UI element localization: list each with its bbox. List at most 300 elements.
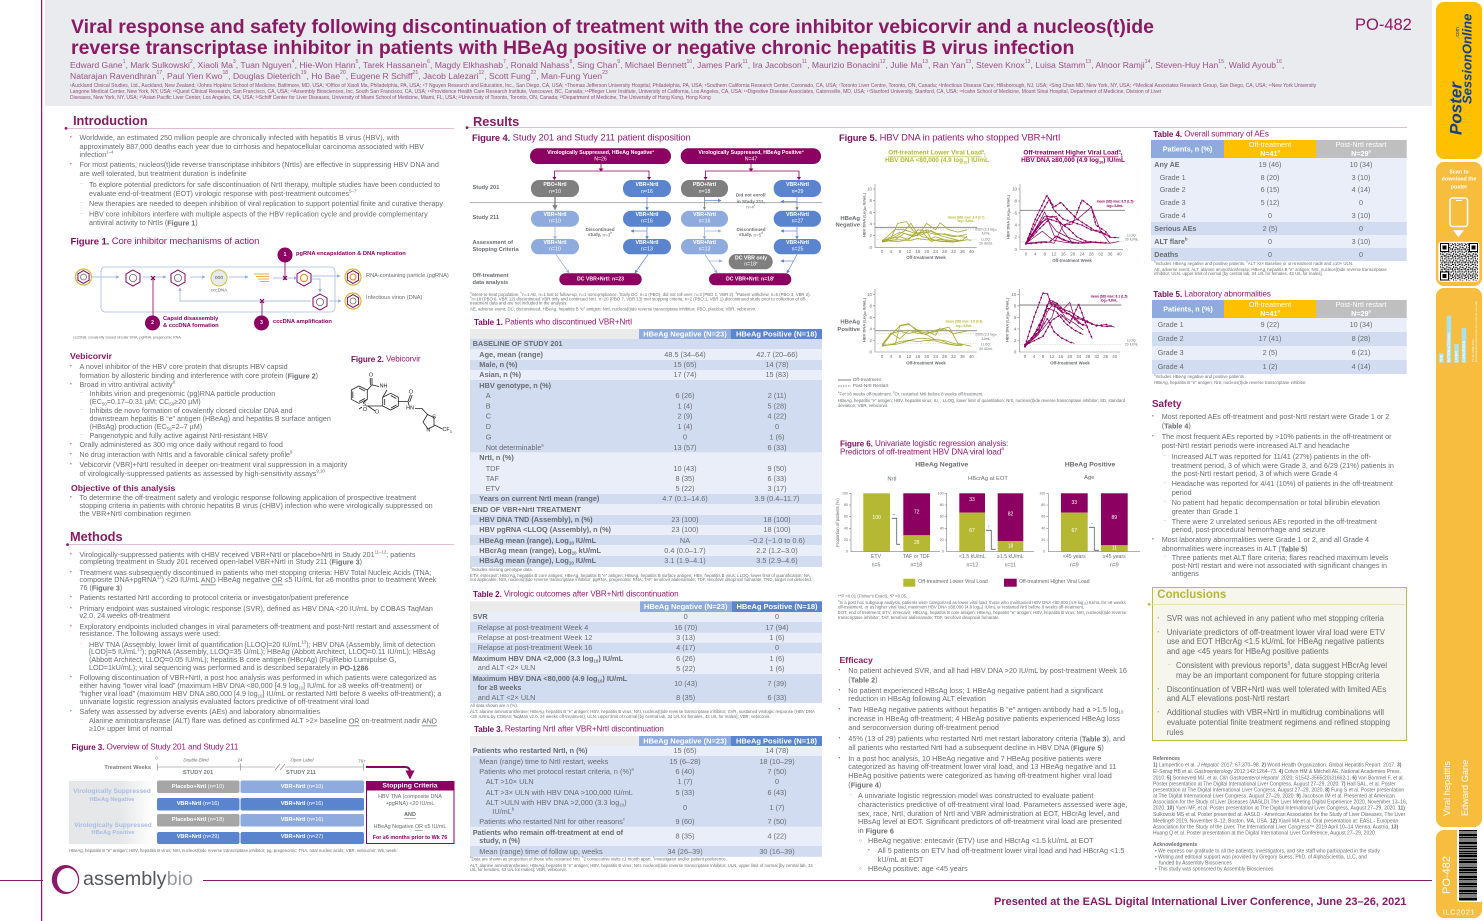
table 1: patients who discontinued: 13 (57) bbox=[673, 443, 697, 452]
diagram: study overview: Double-Blind bbox=[183, 758, 209, 762]
table 3: restarting NrtI: 5 (33) bbox=[675, 788, 695, 797]
text block: efficacy bullets: • bbox=[838, 736, 840, 742]
text block: conclusions bullets: Additional studies with VBR+NrtI in multidrug combinations will bbox=[1167, 708, 1384, 717]
right rail: poster number and barcode: PO-482 bbox=[1441, 856, 1453, 894]
figure 2: vebicorvir structure: O bbox=[409, 390, 413, 396]
text block: efficacy bullets: categorized as having off-treatment lower viral load, and 13 HBeAg negative and 11 bbox=[848, 762, 1116, 771]
right rail: poster session online: SessionOnline bbox=[1460, 14, 1474, 104]
figure 5 column headings: Off-treatment Higher Viral Loadb, bbox=[1023, 149, 1123, 156]
chart: NrtI: n=18 bbox=[910, 562, 922, 568]
text block: efficacy bullets: in Figure 6 bbox=[858, 826, 894, 835]
table 5: laboratory abnormalities: Patients, n (%) bbox=[1163, 304, 1213, 314]
flowchart: patient disposition: n=16 bbox=[641, 218, 653, 224]
flowchart: patient disposition: n=25 bbox=[792, 246, 803, 252]
diagram: core inhibitor mechanisms: cccDNA bbox=[211, 288, 228, 292]
table 2: virologic outcomes: HBeAg Negative (N=23) bbox=[644, 602, 728, 611]
text block: efficacy bullets: (Table 2) bbox=[848, 675, 878, 684]
figure 5 column headings: Off-treatment Lower Viral Loada, bbox=[888, 149, 986, 156]
table 1: patients who discontinued: A bbox=[486, 391, 491, 400]
chart: positive lower viral load: 16 bbox=[915, 354, 921, 359]
diagram: core inhibitor mechanisms bbox=[73, 248, 449, 340]
text block: methods bullets: • bbox=[70, 552, 72, 558]
flowchart: patient disposition: n=4c bbox=[746, 204, 756, 210]
track and author: Edward Gane bbox=[1460, 760, 1470, 816]
table 3: restarting NrtI: IU/mLb bbox=[492, 806, 515, 816]
right rail: poster session online: Poster bbox=[1446, 81, 1466, 135]
panel: introduction bbox=[65, 113, 454, 518]
text block: methods bullets: Alanine aminotransferase (ALT) flare was defined as confirmed ALT >2× baseline OR on-treatment nadir AND bbox=[89, 716, 437, 725]
text block: efficacy bullets bbox=[838, 666, 1127, 873]
text block: vebicorvir bullets: Inhibits virion and pregenomic (pg)RNA particle production bbox=[90, 389, 275, 398]
table 5: laboratory abnormalities: 2 (5) bbox=[1263, 348, 1277, 357]
table 1: patients who discontinued: TDF bbox=[486, 464, 500, 473]
chart: positive higher viral load: 32 bbox=[1094, 354, 1100, 359]
table 3: restarting NrtI: ALT >ULN with HBV DNA >2,000 (3.3 log10) bbox=[486, 798, 627, 807]
references: El-Serag HB et al. Gastroenterology 2012;142:1264–73. 4) Colvin HM & Mitchell AE. National Academies Press. bbox=[1153, 769, 1401, 775]
chart: negative lower viral load: 6 bbox=[870, 210, 873, 215]
text block: conclusions bullets: • bbox=[1158, 709, 1160, 715]
flowchart: patient disposition: VBR+NrtI bbox=[544, 240, 567, 246]
flowchart: patient disposition: Virologically Suppressed, HBeAg Positivea bbox=[698, 149, 804, 156]
table 1: patients who discontinued: 3.1 (1.9–4.1) bbox=[664, 556, 706, 565]
diagram: study overview: HBeAg, hepatitis B “e” antigen; HBV, hepatitis B virus; NrtI, nucleos(t)ide reverse transcriptase inhibitor; pg, pregenomic; TNA, total nucleic acids; VBR, vebicorvir; Wk, week. bbox=[69, 848, 398, 853]
table 3: restarting NrtI: 6 (40) bbox=[675, 767, 695, 776]
table 3: restarting NrtI: Patients who met protocol restart criteria, n (%)a bbox=[479, 766, 634, 776]
text block: vebicorvir bullets: • bbox=[70, 452, 72, 458]
text block: introduction bullets: To explore potential predictors for safe discontinuation of NrtI therapy, multiple studies have been conducted to bbox=[89, 180, 440, 189]
bar charts: predictors of viral load: NrtI bbox=[887, 476, 897, 482]
chart: positive lower viral load bbox=[862, 289, 998, 366]
authors: Edward Gane1, Mark Sulkowski2, Xiaoli Ma3, Tuan Nguyen4, Hie-Won Hann5, Tarek Hassanein6, Magdy Elkhashab7, Ronald Nahass8, Sing Chan9, Michael Bennett10, James Park11, Ira Jacobson11, Maurizio Bonacini12, Julie Ma13, Ran Yan13, Steven Knox13, Luisa Stamm13, Alnoor Ramji14, Steven-Huy Han15, Walid Ayoub16, bbox=[70, 59, 1284, 70]
text block: efficacy bullets: HBeAg positive patients were categorized as having off-treatment higher viral load bbox=[848, 771, 1112, 780]
right rail: congress and track bbox=[1436, 288, 1482, 827]
footnote: table 1 bbox=[470, 566, 812, 582]
chart: positive higher viral load bbox=[1004, 289, 1139, 366]
references: Huang Q et al. Poster presentation at the Digital International Liver Conference, August 27–29, 2020. bbox=[1153, 830, 1376, 836]
chart: negative higher viral load: 0 bbox=[1015, 247, 1018, 252]
table 3: restarting NrtI: 6 (43) bbox=[767, 788, 787, 797]
text block: safety bullets: (Table 4) bbox=[1162, 421, 1191, 430]
diagram: study overview: VBR+NrtI (n=29) bbox=[177, 834, 219, 840]
badge: the international liver congress: CONGRESS bbox=[1462, 340, 1466, 362]
table 1: patients who discontinued: NrtI, n (%) bbox=[479, 453, 514, 462]
flowchart: patient disposition bbox=[470, 148, 822, 286]
chart: negative higher viral load: HBV DNA (Log10 IU/mL) bbox=[1006, 194, 1011, 239]
legend: figure 5: Off-treatment bbox=[853, 377, 882, 383]
chart: age: 67 bbox=[1072, 528, 1077, 534]
chart: negative higher viral load: 10 bbox=[1012, 186, 1018, 192]
diagram: core inhibitor mechanisms: cccDNA amplification bbox=[273, 319, 332, 325]
text block: safety bullets: Increased ALT was reported for 11/41 (27%) patients in the off- bbox=[1172, 452, 1372, 461]
chart: HBcrAg at EOT: 40 bbox=[940, 526, 944, 530]
references: References bbox=[1153, 756, 1180, 762]
table 2: virologic outcomes: 1 (6) bbox=[769, 664, 785, 673]
diagram: study overview: VBR+NrtI (n=10) bbox=[281, 784, 323, 790]
table 4: overall summary of AEs: Grade 4 bbox=[1160, 211, 1186, 220]
chart: positive higher viral load: 20 bbox=[1067, 354, 1073, 359]
footnote: table 5: HBeAg, hepatitis B “e” antigen; NrtI, nucleos(t)ide reverse transcriptase inhibitor. bbox=[1154, 380, 1307, 385]
text block: efficacy bullets: HBsAg level at EOT. Significant predictors of off-treatment viral load are presented bbox=[858, 817, 1122, 826]
text block: vebicorvir bullets: of virologically-suppressed patients as assessed by high-sensitivity assays9,10 bbox=[80, 468, 325, 478]
table 1: patients who discontinued: 2 (11) bbox=[768, 391, 786, 400]
table 1: patients who discontinued: 18 (100) bbox=[763, 525, 791, 534]
affiliations: Diseases, New York, NY, USA; ²⁰Asian Pacific Liver Center, Los Angeles, CA, USA; ²¹Schiff Center for Liver Diseases, University of Miami School of Medicine, Miami, FL, USA; ²²University of Toronto, Toronto, ON, Canada; ²³Department of Medicine, The University of Hong Kong, Hong Kong bbox=[70, 95, 711, 101]
text block: methods bullets: • bbox=[70, 708, 72, 714]
table 3: restarting NrtI: 8 (35) bbox=[675, 832, 695, 840]
text block: efficacy bullets: HBeAg negative: entecavir (ETV) use and HBcrAg <1.5 kU/mL at EOT bbox=[868, 836, 1094, 845]
chart: HBcrAg at EOT: 18 bbox=[1008, 544, 1013, 550]
badge: the international liver congress: LIVER bbox=[1454, 351, 1458, 362]
chart: negative lower viral load: 0 bbox=[881, 249, 884, 254]
table 1: patients who discontinued: TAF bbox=[486, 474, 499, 483]
table 3: restarting NrtI: study, n (%) bbox=[479, 836, 521, 845]
table 3: restarting NrtI: Patients who restarted NrtI for other reasonsc bbox=[479, 816, 626, 826]
footnote: figure 6: EOT, end of treatment; ETV, entecavir; HBcrAg, hepatitis B core antigen; HBeAg, hepatitis “e” antigen; HBV, hepatitis B virus; NrtI, nucleos(t)ide reverse bbox=[838, 610, 1127, 615]
figure 2: vebicorvir structure: S bbox=[432, 414, 436, 420]
affiliations: Langone Medical Center, New York, NY, USA; ¹²Quest Clinical Research, San Francisco, CA, USA; ¹³Assembly Biosciences, Inc, South San Francisco, CA, USA; ¹⁴Providence Health Care Research Institute, Vancouver, BC, Canada; ¹⁵Pfleger Liver Institute, University of California, Los Angeles, CA, USA; ¹⁶Digestive Disease Associates, Catonsville, MD, USA; ¹⁷Stanford University, Stanford, CA, USA; ¹⁸Icahn School of Medicine, Mount Sinai Hospital, Department of Medicine, Division of Liver bbox=[70, 89, 1162, 95]
diagram: study overview: 24 bbox=[238, 758, 243, 762]
figure 5 column headings: HBV DNA <80,000 (4.9 log10) IU/mL bbox=[885, 157, 989, 165]
chart: negative lower viral load: 8 bbox=[899, 249, 902, 254]
chart: negative lower viral load: HBV DNA (Log10 IU/mL) bbox=[862, 192, 867, 237]
text block: methods bullets: Primary endpoint was sustained virologic response (SVR), defined as HBV DNA <20 IU/mL by COBAS TaqMan bbox=[80, 604, 433, 613]
table 4: overall summary of AEs: N=41a bbox=[1260, 148, 1280, 158]
text block: methods bullets: composite DNA+pgRNA12) <20 IU/mL AND HBeAg negative OR ≤5 IU/mL for ≥6 months prior to treatment Week bbox=[80, 574, 437, 584]
table 1: patients who discontinued: 0 bbox=[775, 422, 779, 431]
title: reverse transcriptase inhibitor in patients with HBeAg positive or negative chronic hepatitis B virus infection bbox=[71, 37, 1074, 59]
footnote: figure 4 bbox=[470, 290, 811, 312]
footnote: table 3: U/L for females, 43 U/L for males]; VBR, vebicorvir. bbox=[470, 867, 567, 872]
text block: efficacy bullets: No patient achieved SVR, and all had HBV DNA >20 IU/mL by post-treatment Week 16 bbox=[848, 666, 1127, 675]
flowchart: patient disposition: VBR+NrtI bbox=[786, 182, 810, 188]
table 1: patients who discontinued: 5 (22) bbox=[675, 484, 695, 493]
table 1: patients who discontinued: D bbox=[486, 422, 491, 431]
table 3: restarting NrtI: 4 (22) bbox=[767, 832, 787, 840]
text block: methods bullets bbox=[70, 550, 441, 733]
table 4: overall summary of AEs: 3 (10) bbox=[1352, 237, 1370, 246]
flowchart: patient disposition: in Study 211, bbox=[737, 199, 765, 204]
affiliations: ¹Auckland Clinical Studies, Ltd., Auckland, New Zealand; ²Johns Hopkins School of Medicine, Baltimore, MD, USA; ³Office of Xiaoli Ma, Philadelphia, PA, USA; ⁴T Nguyen Research and Education, Inc., San Diego, CA, USA; ⁵Thomas Jefferson University Hospital, Philadelphia, PA, USA; ⁶Southern California Research Center, Coronado, CA, USA; ⁷Toronto Liver Centre, Toronto, ON, Canada; ⁸Infectious Disease Care, Hillsborough, NJ, USA; ⁹Sing Chan MD, New York, NY, USA; ¹⁰Medical Associates Research Group, San Diego, CA, USA; ¹¹New York University bbox=[70, 83, 1317, 89]
table 5: laboratory abnormalities: 10 (34) bbox=[1350, 320, 1372, 329]
chart: age: 33 bbox=[1072, 500, 1077, 506]
chart: negative higher viral load: 2 bbox=[1015, 234, 1018, 240]
text block: efficacy bullets: all patients who restarted NrtI had a subsequent decline in HBV DNA (Figure 5) bbox=[848, 743, 1104, 752]
table 1: patients who discontinued: 23 (100) bbox=[671, 515, 699, 524]
table 3: restarting NrtI: 15 (6–28) bbox=[669, 757, 701, 766]
table 1: patients who discontinued: 15 (83) bbox=[765, 370, 789, 379]
chart: negative higher viral load: 0 bbox=[1025, 252, 1028, 256]
table 4: overall summary of AEs: Patients, n (%) bbox=[1163, 144, 1213, 154]
flowchart: patient disposition: Virologically Suppressed, HBeAg Negativea bbox=[547, 149, 654, 156]
references: presentation at The Digital International Liver Congress, August 27–29, 2020. 8) Fung S et al. Poster presentation bbox=[1153, 787, 1404, 793]
row labels: HBeAg status: HBeAg bbox=[840, 216, 860, 222]
footnote: figure 4: en=18 (PBO 6, VBR 12) discontinued VBR only and continued NrtI. fn=20 (PBO 7, VBR 13) met stopping criteria, n=2 (PBO 1, VBR 1) discontinued study prior to collection of off- bbox=[470, 295, 807, 302]
chart: positive lower viral load: Off-treatment Week bbox=[906, 360, 946, 366]
chart: HBcrAg at EOT: 0 bbox=[942, 550, 944, 554]
text block: methods bullets: resistance. The following assays were used: bbox=[80, 629, 220, 638]
title bbox=[71, 16, 1154, 59]
chart: age: 40 bbox=[1041, 526, 1045, 530]
references: Association for the Study of the Liver, The International Liver Congress™ 2019 April 10–14 Vienna, Austria. 13) bbox=[1153, 824, 1399, 830]
diagram: core inhibitor mechanisms: 2 bbox=[151, 320, 154, 326]
chart: negative lower viral load: mean (SD) max: 3.4 (0.7) bbox=[948, 215, 984, 219]
icon: QR code bbox=[1438, 242, 1479, 282]
chart: HBcrAg at EOT: n=12 bbox=[966, 562, 978, 568]
chart: negative lower viral load bbox=[862, 184, 998, 260]
panel: methods bbox=[66, 529, 454, 853]
right rail: poster session online: .com bbox=[1455, 27, 1461, 38]
text block: methods bullets: Virologically-suppressed patients with cHBV received VBR+NrtI or placebo+NrtI in Study 20111–12; patients bbox=[80, 550, 416, 559]
table 1: patients who discontinued: 17 (74) bbox=[673, 370, 697, 379]
chart: positive lower viral load: 8 bbox=[870, 303, 873, 308]
text block: safety bullets: • bbox=[1152, 414, 1154, 420]
table 2: virologic outcomes: 7 (39) bbox=[767, 679, 787, 688]
text block: safety bullets: • bbox=[1152, 537, 1154, 543]
panel: efficacy bbox=[838, 655, 1127, 873]
chart: negative higher viral load: 4 bbox=[1034, 252, 1037, 256]
text block: safety bullets: – bbox=[1163, 519, 1167, 525]
chart: negative higher viral load: 12 bbox=[1052, 252, 1057, 256]
figure 2: vebicorvir structure: O bbox=[363, 407, 367, 413]
badge: the international liver congress: INTERNATIONAL bbox=[1447, 331, 1451, 362]
footnote: figure 6: off-treatment, or as higher viral load, maximum HBV DNA ≥80,000 (4.9 log10) IU/mL or restarted NrtI before 8 weeks off-treatment. bbox=[838, 604, 1084, 610]
text block: methods bullets: ≥10× upper limit of normal bbox=[89, 724, 173, 733]
table 3: restarting NrtI: 0 bbox=[775, 777, 779, 786]
footer: conference line: Presented at the EASL Digital International Liver Conference, June 23–26, 2021 bbox=[994, 896, 1406, 908]
text block: safety bullets: the post-NrtI restart period, 3 of which were Grade 4 bbox=[1172, 469, 1337, 478]
text block: methods bullets: HBV TNA (Assembly, lower limit of quantification [LLOQ]=20 IU/mL13); HBV DNA (Assembly, limit of detection bbox=[89, 640, 435, 649]
text block: efficacy bullets: sex, race, NrtI, duration of NrtI and VBR administration at EOT, HBcrAg level, and bbox=[858, 809, 1120, 818]
chart: negative lower viral load: Off-treatment Week bbox=[906, 255, 946, 260]
diagram: study overview: VBR+NrtI (n=16) bbox=[281, 817, 323, 823]
footnote: figure 6: **P <0.01 (Fisher's Exact), *P <0.05. bbox=[838, 594, 907, 598]
chart: negative higher viral load: 28 bbox=[1089, 252, 1094, 256]
acknowledgments: Acknowledgments bbox=[1153, 842, 1197, 848]
text block: efficacy bullets: 45% (13 of 29) patients who restarted NrtI met restart laboratory criteria (Table 3), and bbox=[848, 734, 1125, 743]
chart: negative higher viral load: 16 bbox=[1061, 252, 1066, 256]
footnote: table 1: not applicable; NrtI, nucleos(t)ide reverse transcriptase inhibitor; pgRNA, pregenomic RNA; TAF, tenofovir alafenamide; TDF, tenofovir disoproxil fumarate; TND, target not detected. bbox=[470, 577, 812, 582]
text block: safety bullets: greater than Grade 1 bbox=[1172, 507, 1238, 516]
bar charts: predictors of viral load bbox=[835, 462, 1140, 587]
footnote: figure 6 bbox=[838, 594, 1127, 620]
table 1: patients who discontinued: 1 (6) bbox=[769, 432, 785, 442]
row labels: HBeAg status: Positive bbox=[837, 327, 861, 333]
table 1: patients who discontinued: 3.9 (0.4–11.7) bbox=[755, 494, 799, 503]
diagram: core inhibitor mechanisms: 1 bbox=[284, 252, 287, 258]
table 4: overall summary of AEs: 19 (46) bbox=[1259, 160, 1281, 169]
table 1: patients who discontinued: HBeAg mean (range), Log10 IU/mL bbox=[479, 536, 597, 545]
chart: NrtI: TAF or TDF bbox=[903, 554, 930, 560]
acknowledgments: • Writing and editorial support was provided by Gregory Suess, PhD, of AlphaScientia, LLC, and bbox=[1155, 854, 1367, 860]
table 1: patients who discontinued: C bbox=[486, 412, 491, 420]
table 1: patients who discontinued: 0.4 (0.0–1.7) bbox=[664, 546, 706, 555]
footnote: table 2: All data shown are n (%). bbox=[470, 703, 518, 708]
diagram: study overview: For ≥6 months prior to Wk 76 bbox=[373, 835, 447, 841]
chart: negative lower viral load: 2 bbox=[870, 233, 873, 238]
table 1: patients who discontinued: 4.7 (0.1–14.6) bbox=[662, 494, 708, 503]
text block: methods bullets: • bbox=[70, 624, 72, 630]
table 3: restarting NrtI: ALT >10× ULN bbox=[486, 777, 534, 786]
flowchart: patient disposition: Assessment of bbox=[472, 240, 513, 246]
text block: vebicorvir bullets: Vebicorvir (VBR)+NrtI resulted in deeper on-treatment viral suppression in a majority bbox=[80, 460, 348, 469]
flowchart: patient disposition: n=10 bbox=[549, 189, 561, 195]
text block: methods bullets: Patients restarted NrtI according to protocol criteria or investigator/patient preference bbox=[80, 593, 349, 602]
table 1: patients who discontinued: 18 (100) bbox=[763, 515, 791, 524]
chart: NrtI: ** bbox=[892, 512, 896, 518]
row labels: HBeAg status: HBeAg bbox=[840, 319, 860, 325]
chart: NrtI: 100 bbox=[872, 515, 881, 521]
chart: positive higher viral load: 24 bbox=[1076, 354, 1082, 359]
text block: methods bullets: – bbox=[80, 642, 84, 648]
chart: age: 20 bbox=[1041, 538, 1045, 542]
chart: positive higher viral load: LLOQ: bbox=[1127, 339, 1137, 343]
table 2: virologic outcomes: 16 (70) bbox=[674, 623, 697, 632]
chart: NrtI: 60 bbox=[844, 515, 848, 519]
chart: negative higher viral load: log 10 IU/mL bbox=[1107, 204, 1123, 208]
references: at The Digital International Liver Congress, August 27–29, 2020. 9) Jacobson IM et al. Presented at American bbox=[1153, 793, 1395, 799]
figure 5 column headings: HBV DNA ≥80,000 (4.9 log10) IU/mL bbox=[1021, 157, 1125, 165]
table 4: overall summary of AEs: 5 (12) bbox=[1261, 198, 1279, 207]
figure 2: vebicorvir structure: HN bbox=[406, 405, 414, 411]
flowchart: patient disposition: DC VBR only bbox=[735, 256, 767, 262]
row labels: HBeAg status bbox=[835, 216, 861, 333]
table 5: laboratory abnormalities: N=41a bbox=[1260, 308, 1280, 318]
table 1: patients who discontinued: HBsAg mean (range), Log10 IU/mL bbox=[479, 556, 597, 566]
table 1: patients who discontinued: B bbox=[486, 402, 491, 410]
text block: methods bullets: Exploratory endpoints included changes in viral parameters off-treatment and post-NrtI restart and assessment of bbox=[80, 622, 439, 631]
text block: conclusions bullets: • bbox=[1158, 615, 1160, 621]
text block: vebicorvir bullets: • bbox=[70, 442, 72, 448]
text block: conclusions bullets bbox=[1158, 614, 1390, 737]
chart: positive lower viral load: 20 IU/mL bbox=[979, 347, 993, 351]
right rail: QR download: Scan to bbox=[1449, 170, 1469, 176]
table 4: overall summary of AEs: Deaths bbox=[1154, 250, 1178, 259]
table 1: patients who discontinued: HBV genotype, n (%) bbox=[479, 381, 552, 390]
footnote: table 4: aIncludes HBeAg negative and positive patients. bALT >2× Baseline or on-treatment nadir and ≥10× ULN. bbox=[1154, 259, 1353, 266]
chart: positive lower viral load: 36 bbox=[960, 354, 965, 359]
chart: age: 0 bbox=[1043, 550, 1045, 554]
text block: introduction bullets: • bbox=[70, 162, 72, 168]
text block: vebicorvir bullets: • bbox=[70, 364, 72, 370]
table 3: restarting NrtI: 18 (10–29) bbox=[759, 757, 795, 766]
table 1: patients who discontinued: G bbox=[486, 432, 492, 442]
diagram: study overview: HBeAg Negative bbox=[89, 797, 135, 803]
chart: HBcrAg at EOT: <1.5 kU/mL bbox=[959, 554, 986, 560]
footnote: table 3: ALT, alanine aminotransferase; HBeAg, hepatitis B “e” antigen; HBV, hepatitis B virus; NrtI, nucleos(t)ide reverse transcriptase inhibitor; ULN, upper limit of normal [by central lab, 34 bbox=[470, 863, 813, 868]
acknowledgments: • This study was sponsored by Assembly Biosciences bbox=[1155, 866, 1274, 872]
text block: efficacy bullets: reduction in HBsAg following ALT elevation bbox=[848, 694, 986, 703]
table 4: overall summary of AEs: Any AE bbox=[1154, 160, 1180, 169]
table 3: restarting NrtI: 9 (60) bbox=[675, 817, 695, 826]
right rail: poster number and barcode bbox=[1436, 829, 1483, 918]
table 3: restarting NrtI: 14 (78) bbox=[765, 746, 789, 755]
chart: age: n=9 bbox=[1110, 562, 1119, 568]
diagram: study overview: STUDY 211 bbox=[286, 770, 316, 776]
text block: efficacy bullets: (Figure 4) bbox=[848, 780, 881, 789]
title: Viral response and safety following discontinuation of treatment with the core inhibitor vebicorvir and a nucleos(t)ide bbox=[71, 16, 1154, 38]
text block: introduction bullets bbox=[70, 133, 443, 227]
diagram: study overview: HBeAg Negative OR ≤5 IU/mL bbox=[374, 824, 446, 830]
chart: negative lower viral load: 24 bbox=[933, 249, 939, 254]
table 1: patients who discontinued: HBcrAg mean (range), Log10 kU/mL bbox=[479, 546, 601, 556]
chart: HBcrAg at EOT: 60 bbox=[940, 515, 944, 519]
figure 2: vebicorvir structure: CF3 bbox=[442, 427, 452, 434]
chart: HBcrAg at EOT: 33 bbox=[969, 497, 975, 503]
text block: conclusions bullets: and age <45 years for HBeAg positive patients bbox=[1167, 647, 1329, 656]
chart: HBcrAg at EOT: 82 bbox=[1008, 512, 1013, 518]
chart: negative lower viral load: 32 bbox=[951, 249, 956, 254]
text block: efficacy bullets: A univariate logistic regression model was constructed to evaluate patient bbox=[858, 791, 1093, 800]
legend: figure 5: Post-NrtI Restart bbox=[853, 383, 889, 389]
authors bbox=[70, 59, 1284, 81]
diagram: study overview: 76+ bbox=[358, 758, 366, 764]
chart: negative lower viral load: 16 bbox=[915, 249, 921, 254]
chart: negative higher viral load: 8 bbox=[1015, 198, 1018, 204]
flowchart: patient disposition: Study 211 bbox=[472, 215, 499, 221]
table 3: restarting NrtI bbox=[470, 736, 822, 857]
chart: positive higher viral load: 12 bbox=[1050, 354, 1055, 359]
chart: negative lower viral load: 0 bbox=[870, 245, 873, 250]
table 4: overall summary of AEs: Grade 1 bbox=[1160, 173, 1186, 182]
chart: positive lower viral load: 28 bbox=[942, 354, 947, 359]
flowchart: patient disposition: Off-treatment bbox=[472, 273, 509, 279]
right rail: poster number and barcode: ILC2021 bbox=[1443, 908, 1475, 916]
text block: vebicorvir bullets: A novel inhibitor of the HBV core protein that disrupts HBV capsid bbox=[80, 362, 288, 371]
heading: figure 6: Figure 6. Univariate logistic regression analysis: bbox=[840, 439, 1008, 448]
heading: results: Results bbox=[473, 114, 519, 129]
chart: positive higher viral load: 8 bbox=[1014, 303, 1017, 308]
table 5: laboratory abnormalities bbox=[1152, 300, 1407, 374]
table 1: patients who discontinued: 2 (9) bbox=[677, 412, 693, 420]
flowchart: patient disposition: n=10 bbox=[549, 218, 561, 224]
diagram: study overview: Stopping Criteria bbox=[382, 782, 438, 790]
table 2: virologic outcomes bbox=[470, 601, 822, 703]
text block: methods bullets: (Abbott Architect, LLOQ=0.05 IU/mL); hepatitis B core antigen (HBcrAg) (FujiRebio Lumipulse G, bbox=[89, 655, 396, 664]
text block: methods bullets: univariate logistic regression analysis evaluated factors predictive of off-treatment viral load bbox=[80, 697, 369, 706]
table 4: overall summary of AEs: 0 bbox=[1268, 237, 1272, 246]
chart: negative lower viral load: 2000 (3.3 log 10 bbox=[975, 227, 998, 231]
chart: positive higher viral load: 10 bbox=[1011, 292, 1017, 297]
text block: safety bullets: period bbox=[1172, 488, 1192, 497]
chart: positive higher viral load: 6 bbox=[1014, 315, 1017, 320]
figure 2: vebicorvir structure: Figure 2. Vebicorvir bbox=[351, 354, 421, 364]
diagram: core inhibitor mechanisms: Infectious virion (DNA) bbox=[366, 295, 423, 301]
heading: conclusions: Conclusions bbox=[1157, 589, 1226, 601]
header panel bbox=[45, 0, 1432, 106]
table 1: patients who discontinued: HBV pgRNA <LLOQ (Assembly), n (%) bbox=[479, 525, 612, 534]
table 1: patients who discontinued: 42.7 (20–66) bbox=[756, 350, 798, 359]
text block: methods bullets: Treatment was subsequently discontinued in patients who met stopping criteria: HBV Total Nucleic Acids (TNA; bbox=[80, 568, 431, 577]
chart: positive lower viral load: 4 bbox=[890, 354, 893, 359]
text block: vebicorvir bullets bbox=[70, 362, 348, 478]
table 2: virologic outcomes: for ≥8 weeks bbox=[478, 683, 521, 692]
table 5: laboratory abnormalities: Off-treatment bbox=[1249, 300, 1291, 309]
chart: positive lower viral load: IU/mL bbox=[982, 337, 991, 341]
table 2: virologic outcomes: 0 bbox=[775, 643, 779, 652]
table 2: virologic outcomes: 1 (6) bbox=[769, 633, 785, 642]
chart: positive lower viral load: 6 bbox=[870, 315, 873, 320]
text block: methods bullets: • bbox=[70, 674, 72, 680]
text block: methods bullets: “higher viral load” (maximum HBV DNA ≥80,000 [4.9 log10] IU/mL or restarted NrtI before 8 weeks off-treatment); a bbox=[80, 689, 441, 698]
diagram: core inhibitor mechanisms: RNA-containing particle (pgRNA) bbox=[366, 273, 449, 279]
text block: conclusions bullets: use and EOT HBcrAg <1.5 kU/mL for HBeAg negative patients bbox=[1167, 637, 1384, 646]
chart: NrtI: 80 bbox=[844, 503, 848, 507]
references: Association for the Study of Liver Diseases (AASLD) The Liver Meeting Digital Experience 2020, November 13–16, bbox=[1153, 799, 1407, 805]
chart: negative lower viral load: IU/mL bbox=[982, 232, 991, 236]
table 1: patients who discontinued: 1 (4) bbox=[677, 422, 693, 431]
text block: safety bullets: The most frequent AEs reported by >10% patients in the off-treatment or bbox=[1162, 432, 1392, 441]
bar charts: predictors of viral load: Age bbox=[1084, 475, 1094, 481]
